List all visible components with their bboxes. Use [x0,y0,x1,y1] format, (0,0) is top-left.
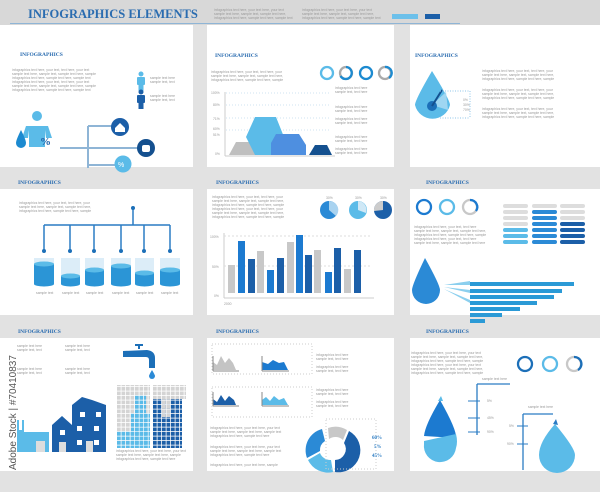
icon: drop with gauge [415,71,470,119]
panel row2 col3: infographics text here, sample text here, sample [414,233,486,237]
header text: infographics text here, your text here, your text [214,8,284,12]
panel row3 col1 [0,338,193,471]
panel row1 col3: sample text here, sample text, sample text here, [482,92,554,96]
drops with scales: 90% [507,442,514,446]
square grid charts: sample text here, sample text here, sample [116,453,181,457]
drops with scales: sample text here [528,405,553,409]
row2 headers [18,180,469,186]
hex chart: 71% [213,117,220,121]
icon: drop with gauge: 0% [463,98,468,102]
panel row2 col2: sample text here, sample text, sample text here, [212,211,284,215]
panel row3 col2: infographics text here, your text here, your text [210,426,280,430]
bar chart: 0% [214,294,219,298]
header text: infographics text here, sample text here, sample text [214,16,293,20]
panel row3 col3: infographics text here, sample text here, sample [411,359,483,363]
donut chart [306,419,382,473]
panel row2 col1: sample text [161,291,178,295]
hex chart: 60% [213,127,220,131]
panel row1 col3: sample text here, sample text, sample text here, [482,111,554,115]
tree diagram: % [118,162,124,169]
text block: sample text here, sample text, sample text here, sample [12,84,96,88]
panel row1 col3: infographics text here, sample text here, sample [482,77,554,81]
panel row2 col2 [207,189,394,315]
row3 headers: INFOGRAPHICS [426,329,469,335]
panel row2 col2: infographics text here, your text, text here, your [212,195,284,199]
panel row2 col1: infographics text here, your text, text here, your [19,201,91,205]
icon: big person with drop: % [40,136,51,148]
panel row2 col2: infographics text here, your text, text here, your [212,207,284,211]
icon: drop with gauge: 30% [463,103,470,107]
icon: big person with drop [16,111,52,148]
square grid charts: infographics text here, sample text here [116,457,175,461]
panel row1 col2: infographics text here [335,86,368,90]
panel row2 col1: infographics text here, sample text here, sample [19,209,91,213]
row3 headers: INFOGRAPHICS [216,329,259,335]
panel row2 col2: infographics text here, sample text here, sample [212,215,284,219]
panel row2 col3: sample text here, sample text, sample text here [414,241,485,245]
pie icons [320,196,392,219]
drops with scales: 5% [487,399,492,403]
pie icons: 30% [355,196,362,200]
panel row2 col3: infographics text here, your text, text here [414,237,476,241]
donut chart: 60% [372,436,382,441]
donuts [417,200,477,214]
panel row2 col3 [410,189,600,323]
header text: sample text here, sample text, sample text here, [214,12,286,16]
panel row2 col1: sample text [136,291,153,295]
mini area charts [212,344,312,417]
panel row1 col2: sample text, text here [335,121,368,125]
pill grid [503,204,585,244]
drops with scales [424,377,575,473]
panel row1 col3: infographics text here, your text, text here, your [482,107,554,111]
donut chart: 45% [372,454,382,459]
panel row3 col2: sample text here, sample text here, sample text [210,430,281,434]
panel row1 col2: sample text, text here [335,139,368,143]
header text: infographics text here, sample text here, sample text [302,16,381,20]
header text: sample text here, sample text, sample text here, [302,12,374,16]
panel row3 col3: infographics text here, your text here, your text [411,363,481,367]
text block: infographics text here, sample text here, sample text [12,88,91,92]
cylinder tree [44,209,170,250]
panel row1 col3 [410,25,600,167]
panel row3 col2: sample text, text here [316,369,349,373]
panel row3 col1: sample text, text [65,348,90,352]
panel row3 col2: sample text, text here [316,392,349,396]
panel row3 col2: infographics text here, sample text here [210,434,269,438]
panel row3 col2: sample text here, sample text here, sample text [210,449,281,453]
square grid charts: infographics text here, your text here, your text [116,449,186,453]
icon: faucet [123,344,155,379]
row3 headers [18,329,469,335]
panel row1 col2: infographics text here [335,135,368,139]
panel row1 col2: sample text here, sample text, sample text here, [211,74,283,78]
panel row3 col3: sample text here, sample text, sample text here, [411,367,483,371]
panel row3 col3: infographics text here, your text here, your text [411,351,481,355]
donut chart: 5% [374,445,382,450]
panel row3 col1: sample text here [65,344,90,348]
row3 headers: INFOGRAPHICS [18,329,61,335]
bar chart [210,233,374,306]
panel row1 col2: infographics text here, sample text here, sample [211,78,283,82]
text block [12,68,96,92]
donut row [321,67,392,79]
header squares [392,14,440,19]
panel row1 col3: infographics text here, your text, text here, your [482,69,554,73]
drops with scales: sample text here [482,377,507,381]
bar chart: 2000 [224,302,232,306]
panel row3 col2: infographics text here [316,365,349,369]
pie icons: 30% [326,196,333,200]
header [0,0,600,25]
panel row1 col2: infographics text here [335,105,368,109]
panel row2 col3: infographics text here, your text, text here [414,225,476,229]
donuts [518,357,581,371]
drops with scales: 45% [487,416,494,420]
panel row2 col1: sample text [62,291,79,295]
bar chart: 50% [212,265,219,269]
panel row1 col2: infographics text here, your text, text here, your [211,70,283,74]
header text: infographics text here, your text here, your text [302,8,372,12]
pie icons: 30% [380,196,387,200]
icon: persons: sample text here [150,94,175,98]
hex chart [211,91,335,156]
text block: infographics text here, your text, text here, your text [12,80,89,84]
panel row3 col2: infographics text here, your text here, sample [210,463,278,467]
panel row3 col3 [410,338,600,473]
watermark credit: Adobe Stock | #70410837 [8,355,19,470]
panel row1 col2: INFOGRAPHICS [215,53,258,59]
icon: factory & houses [17,397,106,452]
panel row3 col2: infographics text here [316,388,349,392]
hex chart: 100% [211,91,220,95]
panel row2 col1: sample text here, sample text, sample text here, [19,205,91,209]
panel row1 col2: sample text, text here [335,90,368,94]
panel row3 col2: sample text, text here [316,404,349,408]
icon: drop with gauge: 70% [463,108,470,112]
drop with rays [412,258,574,323]
header text [214,8,381,20]
panel row3 col1: sample text, text [17,348,42,352]
panel row3 col1: sample text here [17,344,42,348]
icon: persons [137,72,175,109]
bar chart: 100% [210,235,219,239]
panel row3 col1: sample text, text [17,371,42,375]
text block: sample text here, sample text, sample text here, sample [12,72,96,76]
panel row3 col1: sample text here [65,367,90,371]
panel row2 col1: sample text [86,291,103,295]
panel row2 col1: sample text [112,291,129,295]
panel row3 col3: infographics text here, sample text here, sample [411,371,483,375]
panel row1 col3: sample text here, sample text, sample text here, [482,73,554,77]
row2 headers: INFOGRAPHICS [426,180,469,186]
panel row3 col2: sample text, text here [316,357,349,361]
panel row2 col3: sample text here, sample text, sample text here, [414,229,486,233]
panel row1 col2: sample text, text here [335,151,368,155]
hex chart: 0% [215,152,220,156]
hex chart: 51% [213,133,220,137]
panel row2 col1: sample text [36,291,53,295]
title: INFOGRAPHICS ELEMENTS [28,7,198,21]
icon: persons: sample text here [150,76,175,80]
panel row3 col2 [207,338,394,473]
panel row1 col3: INFOGRAPHICS [415,53,458,59]
panel row1 col2 [207,25,394,167]
icon: persons: sample text, text [150,80,175,84]
panel row3 col1: sample text, text [65,371,90,375]
panel row3 col2: infographics text here, your text here, your text [210,445,280,449]
square grid charts [116,385,186,461]
panel row3 col1: sample text here [17,367,42,371]
panel row1 col2: infographics text here [335,147,368,151]
drops with scales: 5% [509,424,514,428]
tree diagram [60,118,155,172]
row2 headers: INFOGRAPHICS [216,180,259,186]
panel row1 col1 [0,25,193,172]
panel row2 col2: sample text here, sample text, sample text here, [212,199,284,203]
panel row1 col1: INFOGRAPHICS [20,52,63,58]
icon: persons: sample text, text [150,98,175,102]
text block: infographics text here, sample text here, sample text [12,76,91,80]
panel row1 col3: infographics text here, sample text here, sample [482,96,554,100]
row2 headers: INFOGRAPHICS [18,180,61,186]
panel row2 col1 [0,189,193,315]
panel row1 col2: sample text, text here [335,109,368,113]
panel row1 col2: infographics text here [335,117,368,121]
panel row1 col3: infographics text here, sample text here, sample [482,115,554,119]
panel row1 col3: infographics text here, your text, text here, your [482,88,554,92]
drops with scales: 90% [487,430,494,434]
panel row2 col2: infographics text here, sample text here, sample [212,203,284,207]
panel row3 col2: infographics text here, sample text here [210,453,269,457]
hex chart: 80% [213,103,220,107]
text block: infographics text here, your text, text here, your text [12,68,89,72]
panel row3 col2: infographics text here [316,400,349,404]
panel row3 col2: infographics text here [316,353,349,357]
panel row3 col3: sample text here, sample text, sample text here, [411,355,483,359]
